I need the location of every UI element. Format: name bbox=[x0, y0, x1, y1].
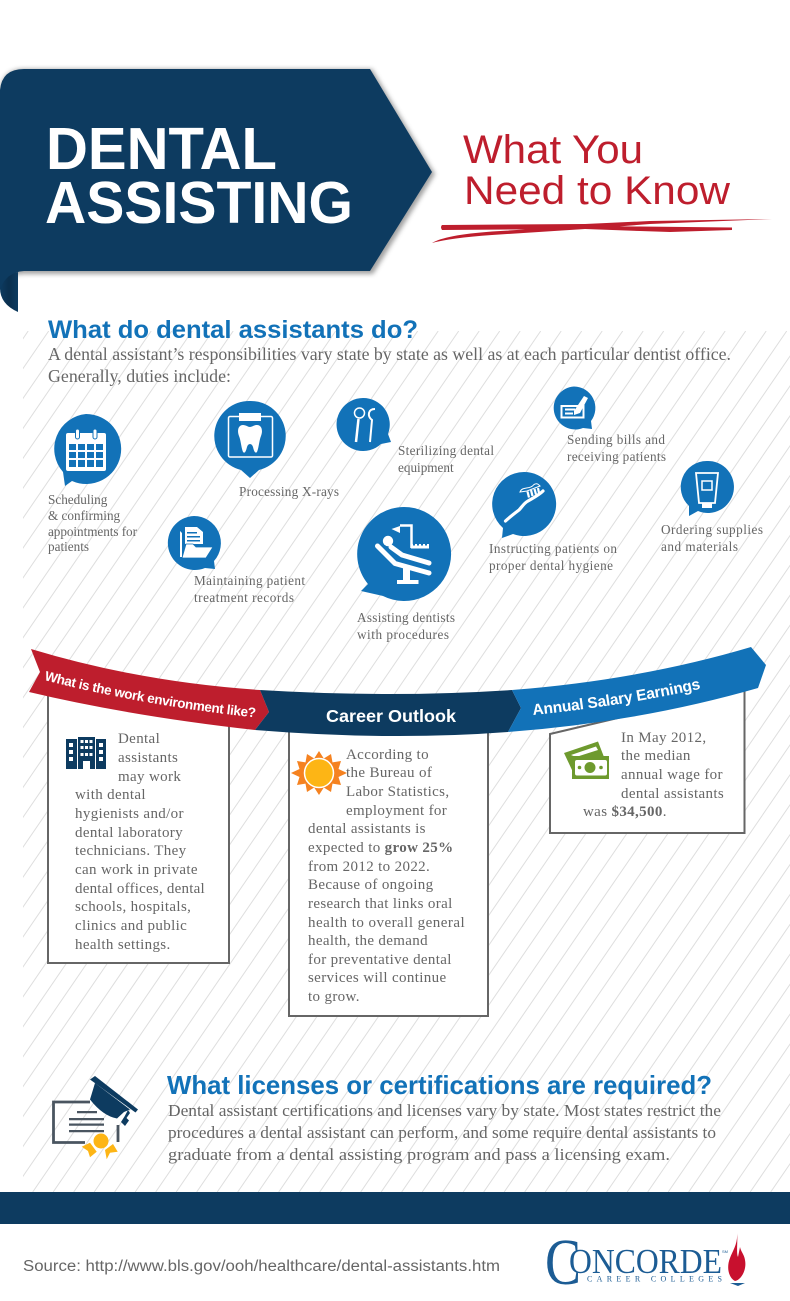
body text: hygienists and/or bbox=[75, 806, 184, 822]
body text: According to bbox=[346, 747, 429, 763]
body text: annual wage for bbox=[621, 767, 723, 783]
section: what do dental assistants do bbox=[48, 316, 731, 386]
duty: hygiene bbox=[489, 472, 617, 573]
label: and materials bbox=[661, 539, 738, 554]
ribbon segment: annual salary: Annual Salary Earnings bbox=[533, 681, 700, 715]
ribbon segment: work environment: What is the work environment like? bbox=[46, 671, 256, 717]
body text: dental laboratory bbox=[75, 825, 183, 841]
duty: billing bbox=[554, 386, 666, 464]
source text: Source: http://www.bls.gov/ooh/healthcare/dental-assistants.htm bbox=[23, 1258, 500, 1275]
label: Maintaining patient bbox=[194, 573, 305, 588]
body text: from 2012 to 2022. bbox=[308, 859, 430, 875]
icon: dental tools bbox=[337, 398, 391, 451]
body text: can work in private bbox=[75, 862, 198, 878]
label: Scheduling bbox=[48, 492, 108, 507]
duty: assisting bbox=[357, 507, 455, 642]
body text: expected to grow 25% bbox=[308, 840, 453, 856]
body text: services will continue bbox=[308, 970, 446, 986]
label: Sterilizing dental bbox=[398, 443, 494, 458]
icon: calendar bbox=[54, 414, 121, 486]
logo: Concorde Career Colleges: SM bbox=[722, 1249, 728, 1254]
logo: Concorde Career Colleges: C bbox=[545, 1226, 581, 1299]
panel: salary bbox=[550, 688, 744, 833]
banner fold bbox=[0, 272, 18, 312]
logo: Concorde Career Colleges: ONCORDE bbox=[569, 1242, 722, 1281]
icon: money bbox=[564, 742, 609, 779]
subtitle: What You bbox=[463, 128, 643, 172]
curved ribbon bbox=[29, 647, 766, 736]
label: receiving patients bbox=[567, 449, 666, 464]
body text: research that links oral bbox=[308, 896, 453, 912]
body text: technicians. They bbox=[75, 843, 187, 859]
body text: Because of ongoing bbox=[308, 877, 434, 893]
icon: folder bbox=[168, 516, 221, 570]
icon: building bbox=[66, 737, 106, 769]
label: Assisting dentists bbox=[357, 610, 455, 625]
subtitle bbox=[432, 128, 772, 243]
ribbon segment: career outlook: Career Outlook bbox=[326, 706, 456, 726]
red underline scribble bbox=[432, 219, 772, 243]
body text: was $34,500. bbox=[583, 804, 667, 820]
body text: health, the demand bbox=[308, 933, 428, 949]
body text: with dental bbox=[75, 787, 146, 803]
duty: records bbox=[168, 516, 305, 605]
body text: procedures a dental assistant can perform, and some require dental assistants to bbox=[168, 1123, 716, 1142]
body text: Dental bbox=[118, 731, 160, 747]
heading: What licenses or certifications are required? bbox=[167, 1070, 712, 1100]
body text: In May 2012, bbox=[621, 730, 706, 746]
icon: check and pen bbox=[554, 386, 595, 429]
body text: assistants bbox=[118, 750, 178, 766]
label: appointments for bbox=[48, 524, 138, 539]
icon: tooth x-ray bbox=[214, 401, 286, 478]
intro text: Generally, duties include: bbox=[48, 366, 231, 386]
body text: employment for bbox=[346, 803, 447, 819]
label: Processing X-rays bbox=[239, 484, 339, 499]
duty: x-rays bbox=[214, 401, 339, 499]
body text: health settings. bbox=[75, 937, 171, 953]
duty: scheduling bbox=[48, 414, 138, 554]
panel: work environment bbox=[48, 690, 229, 963]
body text: health to overall general bbox=[308, 915, 465, 931]
body text: the median bbox=[621, 748, 691, 764]
label: Ordering supplies bbox=[661, 522, 763, 537]
label: proper dental hygiene bbox=[489, 558, 613, 573]
body text: to grow. bbox=[308, 989, 360, 1005]
duty: supplies bbox=[661, 461, 763, 554]
label: Instructing patients on bbox=[489, 541, 617, 556]
subtitle: Need to Know bbox=[464, 169, 730, 213]
body text: may work bbox=[118, 769, 181, 785]
icon: toothbrush bbox=[492, 472, 556, 538]
body text: graduate from a dental assisting program and pass a licensing exam. bbox=[168, 1145, 670, 1164]
label: Sending bills and bbox=[567, 432, 665, 447]
logo: Concorde Career Colleges: CAREER COLLEGES bbox=[587, 1274, 722, 1284]
ribbon segment: annual salary bbox=[508, 647, 766, 732]
duty: sterilizing bbox=[337, 398, 494, 475]
title: ASSISTING bbox=[45, 170, 353, 236]
label: & confirming bbox=[48, 508, 121, 523]
label: treatment records bbox=[194, 590, 294, 605]
footer bar bbox=[0, 1192, 790, 1224]
logo: Concorde Career Colleges bbox=[545, 1226, 745, 1299]
ribbon segment: career outlook bbox=[255, 690, 521, 736]
body text: dental assistants is bbox=[308, 821, 426, 837]
ribbon segment: work environment bbox=[29, 649, 269, 730]
body text: Dental assistant certifications and licenses vary by state. Most states restrict the bbox=[168, 1101, 721, 1120]
icon: flame bbox=[728, 1232, 745, 1281]
icon: sun bbox=[291, 751, 347, 795]
intro text: A dental assistant’s responsibilities vary state by state as well as at each particular dentist office. bbox=[48, 344, 731, 364]
icon: diploma and cap bbox=[54, 1076, 138, 1159]
panel: career outlook bbox=[289, 710, 488, 1016]
body text: clinics and public bbox=[75, 918, 187, 934]
icon: dental chair bbox=[357, 507, 451, 601]
label: patients bbox=[48, 539, 89, 554]
section: licenses bbox=[54, 1070, 721, 1164]
header banner bbox=[0, 69, 435, 312]
body text: for preventative dental bbox=[308, 952, 452, 968]
heading: What do dental assistants do? bbox=[48, 316, 418, 344]
label: with procedures bbox=[357, 627, 449, 642]
icon: tube bbox=[681, 461, 734, 516]
title: DENTAL bbox=[46, 116, 277, 182]
body text: Labor Statistics, bbox=[346, 784, 449, 800]
body text: schools, hospitals, bbox=[75, 899, 191, 915]
body text: the Bureau of bbox=[346, 765, 432, 781]
body text: dental offices, dental bbox=[75, 881, 205, 897]
body text: dental assistants bbox=[621, 786, 724, 802]
label: equipment bbox=[398, 460, 454, 475]
